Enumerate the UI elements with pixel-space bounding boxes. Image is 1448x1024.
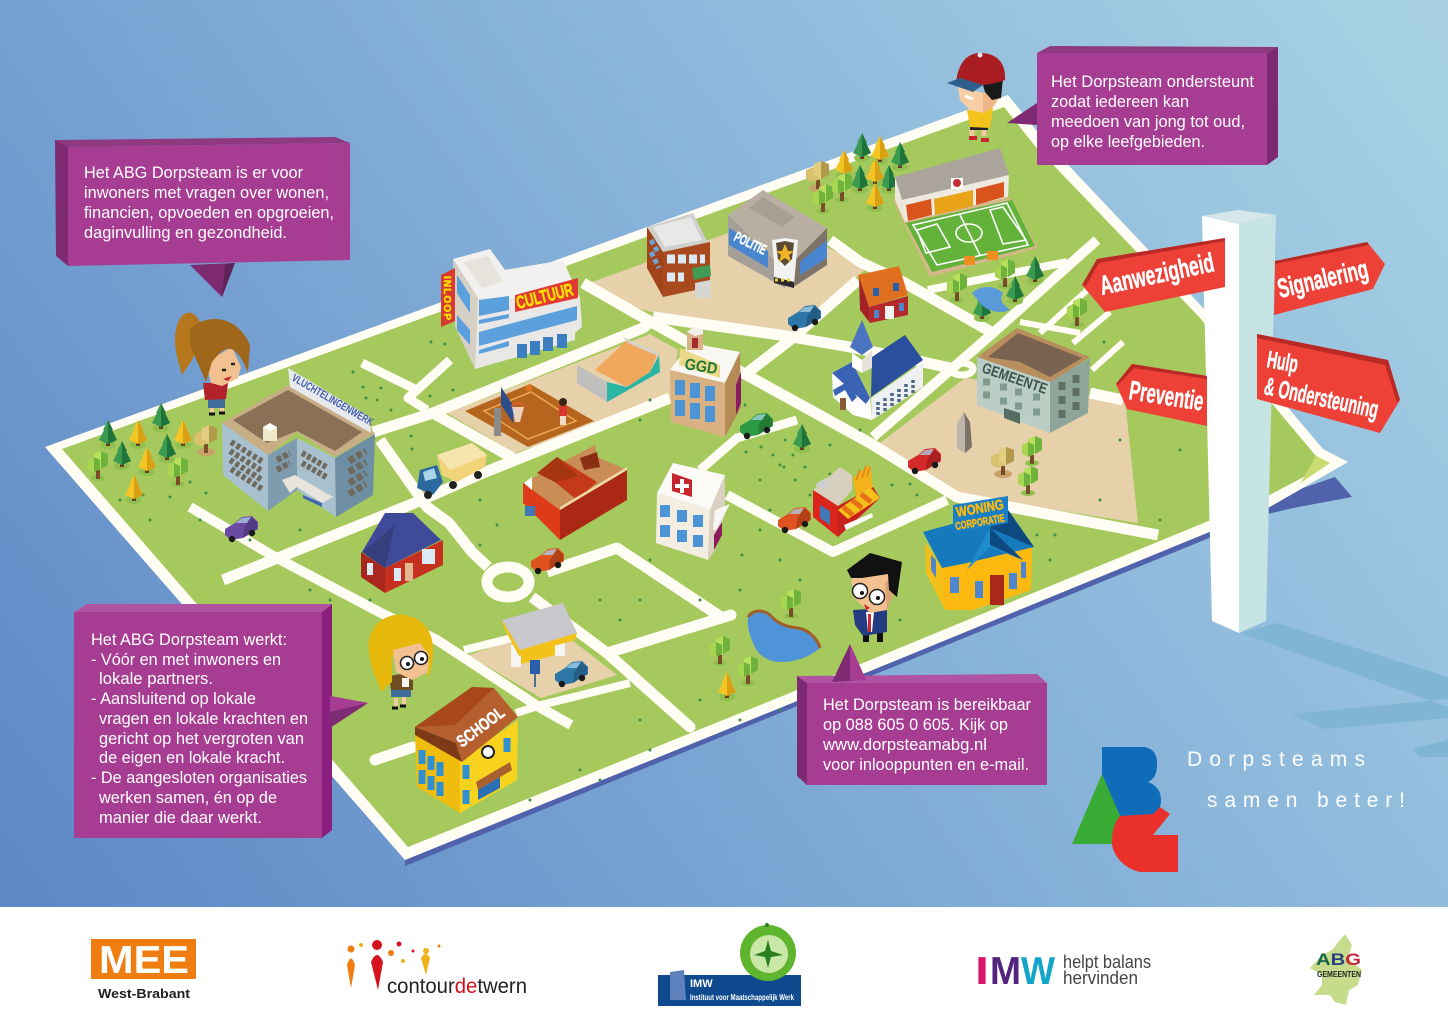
sign: preventie: Preventie	[1127, 375, 1206, 417]
logo: IMW Instituut voor Maatschappelijk Werk: Instituut voor Maatschappelijk Werk	[690, 992, 794, 1002]
building: politie	[728, 190, 827, 288]
logo: contour de twern: contourdetwern	[387, 975, 527, 998]
trees	[88, 133, 1087, 701]
callout: support for everyone: zodat iedereen kan	[1051, 92, 1189, 111]
logo: MEE West-Brabant	[91, 939, 196, 1001]
callout: how the Dorpsteam works	[74, 604, 368, 838]
pond rim	[748, 611, 820, 648]
building: woning corporatie: WONING	[955, 496, 1005, 520]
callout: how the Dorpsteam works: lokale partners.	[99, 669, 213, 688]
building: cultuur	[441, 249, 582, 369]
obelisk monument	[957, 412, 972, 453]
building: vluchtelingenwerk	[222, 368, 375, 517]
slogan	[1187, 748, 1405, 812]
logo: IMW helpt balans hervinden	[975, 950, 1151, 993]
sign: signalering: Signalering	[1275, 254, 1371, 304]
building: fries shop	[813, 465, 880, 537]
callout: how the Dorpsteam works: - Vóór en met inwoners en	[91, 650, 281, 669]
building: woning corporatie	[923, 496, 1034, 611]
callout: how the Dorpsteam works: vragen en lokale krachten en	[99, 709, 308, 728]
logo: IMW helpt balans hervinden: W	[1021, 950, 1055, 993]
building: red brick	[647, 213, 711, 298]
logo: contour de twern	[347, 940, 527, 998]
building: red house with blue roof	[361, 513, 443, 593]
callout: support for everyone: meedoen van jong tot oud,	[1051, 112, 1245, 131]
basketball court	[465, 384, 594, 447]
character: boy with red cap	[947, 52, 1005, 140]
callout: how the Dorpsteam works: de eigen en lokale kracht.	[99, 748, 285, 767]
character: man with glasses	[847, 553, 902, 642]
callout: how the Dorpsteam works: Het ABG Dorpsteam werkt:	[91, 630, 287, 649]
callout: who the Dorpsteam is for: Het ABG Dorpsteam is er voor	[84, 163, 303, 182]
slogan: samen beter!	[1207, 789, 1405, 812]
building: politie: POLITIE	[732, 228, 769, 258]
signpost shadow	[1240, 623, 1448, 757]
building: cultuur: INLOOP	[441, 276, 452, 320]
building: cultuur: CULTUUR	[514, 279, 575, 313]
callout: who the Dorpsteam is for: financien, opvoeden en opgroeien,	[84, 203, 334, 222]
logo: IMW helpt balans hervinden: I	[975, 950, 989, 993]
building: ggd	[670, 327, 741, 437]
building: stadium and football pitch	[893, 148, 1038, 277]
building: vluchtelingenwerk: VLUCHTELINGENWERK	[290, 372, 375, 429]
callout: support for everyone: op elke leefgebieden.	[1051, 132, 1205, 151]
logo: IMW helpt balans hervinden: hervinden	[1063, 968, 1138, 988]
building: gemeente: GEMEENTE	[980, 360, 1050, 398]
callout: who the Dorpsteam is for: inwoners met vragen over wonen,	[84, 183, 329, 202]
building: large red hall	[523, 445, 627, 540]
vehicles	[225, 305, 941, 687]
callout: how the Dorpsteam works: gericht op het vergroten van	[99, 729, 304, 748]
map of the village	[45, 95, 1352, 866]
sign: aanwezigheid: Aanwezigheid	[1097, 247, 1217, 301]
logo: IMW Instituut voor Maatschappelijk Werk	[658, 923, 801, 1006]
footer strip	[0, 907, 1448, 1024]
callout: contact details: www.dorpsteamabg.nl	[822, 735, 987, 754]
road network	[190, 240, 1158, 760]
building: school: SCHOOL	[453, 703, 508, 751]
callout: how the Dorpsteam works: - De aangesloten organisaties	[91, 768, 307, 787]
building: ggd: GGD	[683, 356, 719, 378]
logo: MEE West-Brabant: West-Brabant	[98, 986, 191, 1001]
ABG logo	[1072, 747, 1178, 872]
building: gemeente	[977, 328, 1090, 433]
building: church	[832, 320, 923, 420]
logo: MEE West-Brabant: MEE	[99, 939, 189, 982]
callout: contact details	[797, 644, 1047, 785]
logo: IMW helpt balans hervinden: M	[990, 950, 1021, 993]
logo: ABG gemeenten: ABG	[1316, 950, 1361, 969]
sign: hulp en ondersteuning	[1257, 334, 1400, 433]
signpost	[1082, 210, 1400, 633]
building: hospital	[656, 463, 730, 560]
small pond	[972, 287, 1010, 312]
skate ramp	[577, 337, 660, 402]
building: orange house	[858, 266, 908, 323]
callout: how the Dorpsteam works: - Aansluitend op lokale	[91, 689, 256, 708]
callout: contact details: voor inlooppunten en e-mail.	[823, 755, 1029, 774]
callout: how the Dorpsteam works: werken samen, én op de	[98, 788, 277, 807]
sign: signalering	[1274, 242, 1385, 315]
callout: contact details: op 088 605 0 605. Kijk op	[823, 715, 1008, 734]
character: blonde woman with glasses	[369, 614, 433, 708]
gas station	[502, 603, 577, 687]
building: school	[415, 687, 518, 813]
building: woning corporatie: CORPORATIE	[954, 512, 1006, 533]
logo: ABG gemeenten: GEMEENTEN	[1317, 970, 1361, 979]
logo: ABG gemeenten	[1310, 934, 1362, 1005]
slogan: Dorpsteams	[1187, 748, 1365, 771]
logo: IMW helpt balans hervinden: helpt balans	[1063, 952, 1151, 972]
callout: who the Dorpsteam is for: daginvulling en gezondheid.	[84, 223, 287, 242]
logo: IMW Instituut voor Maatschappelijk Werk: IMW	[690, 978, 713, 990]
sign: hulp en ondersteuning: Hulp	[1265, 346, 1300, 378]
plazas	[447, 233, 1138, 698]
callout: support for everyone	[1007, 46, 1278, 165]
callout: how the Dorpsteam works: manier die daar werkt.	[99, 808, 262, 827]
grass dots	[120, 342, 1180, 800]
character: woman with ponytail	[175, 313, 250, 414]
callout: who the Dorpsteam is for	[55, 137, 350, 297]
callout: contact details: Het Dorpsteam is bereikbaar	[823, 695, 1031, 714]
sign: preventie	[1116, 364, 1207, 426]
callout: support for everyone: Het Dorpsteam ondersteunt	[1051, 72, 1254, 91]
sign: aanwezigheid	[1082, 238, 1225, 312]
pond	[748, 611, 820, 662]
